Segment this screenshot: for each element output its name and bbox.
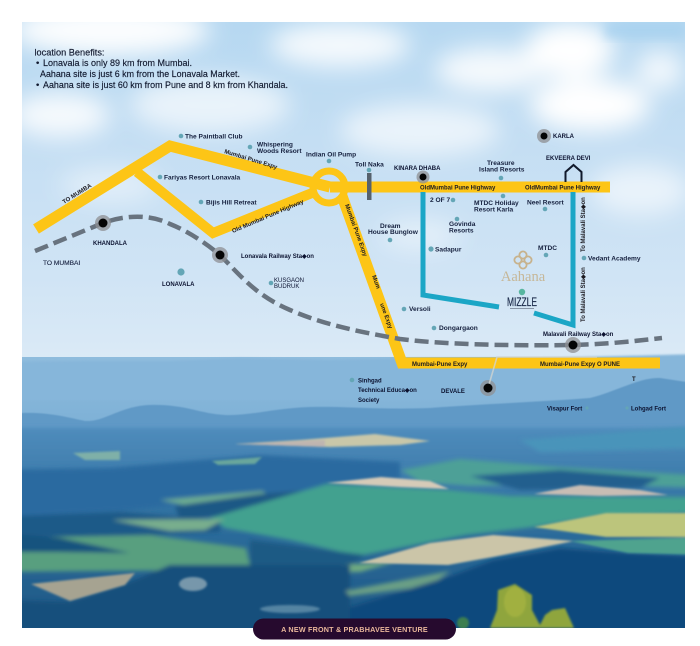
venture pill banner: A NEW FRONT & PRABHAVEE VENTURE — [281, 625, 428, 634]
road and direction labels: OldMumbai Pune Highway — [525, 186, 601, 192]
place labels: MTDC — [538, 245, 557, 252]
forest and field masses — [0, 455, 400, 518]
location benefits text — [34, 48, 288, 91]
road and direction labels: Mum — [370, 275, 381, 290]
place labels: Treasure — [487, 160, 515, 167]
road and direction labels: Mumbai Pune Expy — [223, 149, 278, 171]
place labels: MTDC Holiday — [474, 200, 519, 207]
place labels: 2 OF 7 — [430, 197, 450, 204]
road and direction labels — [62, 149, 636, 383]
road and direction labels: une Expy — [378, 303, 393, 330]
place labels: Society — [358, 398, 380, 404]
road and direction labels: To Malavali Sta◆on — [580, 197, 587, 252]
place labels: Dream — [380, 223, 401, 230]
icon: Aahana lotus emblem — [514, 251, 532, 269]
place labels: Island Resorts — [479, 166, 525, 174]
place labels: LONAVALA — [162, 282, 195, 288]
location benefits text: • — [36, 58, 39, 69]
place labels: Whispering — [257, 142, 293, 148]
venture pill banner — [253, 618, 456, 640]
icon: Ekveera Devi temple arch — [566, 165, 582, 182]
place labels — [43, 134, 666, 412]
place labels: KARLA — [553, 134, 575, 140]
road and direction labels: TO MUMBA — [62, 183, 94, 206]
place labels: Vedant Academy — [588, 256, 641, 262]
place labels: KHANDALA — [93, 241, 128, 247]
railway line — [35, 217, 662, 345]
location benefits text: Aahana site is just 6 km from the Lonavala Market. — [40, 69, 240, 80]
road and direction labels: T — [632, 377, 636, 383]
place labels: The Paintball Club — [185, 134, 243, 140]
place labels: DEVALE — [441, 389, 465, 395]
place labels: TO MUMBAI — [43, 260, 80, 267]
yellow road network — [36, 146, 660, 363]
place labels: Toll Naka — [355, 162, 384, 168]
place labels: KUSGAON — [274, 278, 304, 284]
place labels: KINARA DHABA — [394, 166, 441, 172]
location benefits text: Lonavala is only 89 km from Mumbai. — [43, 58, 192, 69]
road and direction labels: Mumbai Pune Expy — [343, 204, 368, 258]
road and direction labels: Old Mumbai Pune Highway — [231, 199, 305, 235]
place labels: Malavali Railway Sta◆on — [543, 331, 614, 338]
place labels: Sadapur — [435, 246, 462, 254]
place labels: House Bunglow — [368, 229, 419, 236]
road and direction labels: To Malavali Sta◆on — [580, 267, 587, 322]
sky with clouds — [10, 4, 690, 362]
Mizzle logo: MIZZLE — [507, 297, 537, 309]
place labels: Bijis Hill Retreat — [206, 200, 257, 206]
road and direction labels: Mumbai-Pune Expy O PUNE — [540, 362, 620, 368]
place labels: Lohgad Fort — [631, 406, 666, 412]
place labels: Visapur Fort — [547, 406, 582, 412]
place labels: Lonavala Railway Sta◆on — [241, 253, 314, 260]
Aahana logo: Aahana — [501, 269, 546, 285]
roundabout — [313, 171, 345, 203]
place labels: Govinda — [449, 221, 476, 228]
road and direction labels: OldMumbai Pune Highway — [420, 186, 496, 192]
place labels: Technical Educa◆on — [358, 387, 417, 394]
place labels: Resort Karla — [474, 206, 514, 214]
place labels: EKVEERA DEVI — [546, 156, 591, 162]
stations and town markers — [95, 129, 597, 396]
place labels: Indian Oil Pump — [306, 152, 356, 158]
valley fields — [22, 426, 685, 628]
Mizzle logo — [507, 289, 537, 309]
blue link roads — [423, 192, 573, 325]
place labels: Versoli — [409, 306, 431, 313]
place labels: Dongargaon — [439, 325, 478, 332]
place labels: Neel Resort — [527, 200, 564, 206]
place labels: Woods Resort — [257, 148, 302, 155]
location benefits text: • — [36, 80, 39, 91]
road and direction labels: Mumbai-Pune Expy — [412, 362, 468, 368]
location benefits text: location Benefits: — [34, 48, 104, 58]
Aahana logo — [501, 251, 546, 285]
teal location dots — [158, 134, 629, 410]
place labels: Resorts — [449, 228, 474, 234]
distant haze and mountains — [22, 353, 685, 432]
place labels: BUDRUK — [274, 284, 299, 290]
treetop foliage — [457, 584, 574, 629]
place labels: Fariyas Resort Lonavala — [164, 174, 241, 182]
location benefits text: Aahana site is just 60 km from Pune and 8 km from Khandala. — [43, 80, 288, 91]
toll barrier — [367, 173, 372, 200]
place labels: Sinhgad — [358, 378, 382, 384]
